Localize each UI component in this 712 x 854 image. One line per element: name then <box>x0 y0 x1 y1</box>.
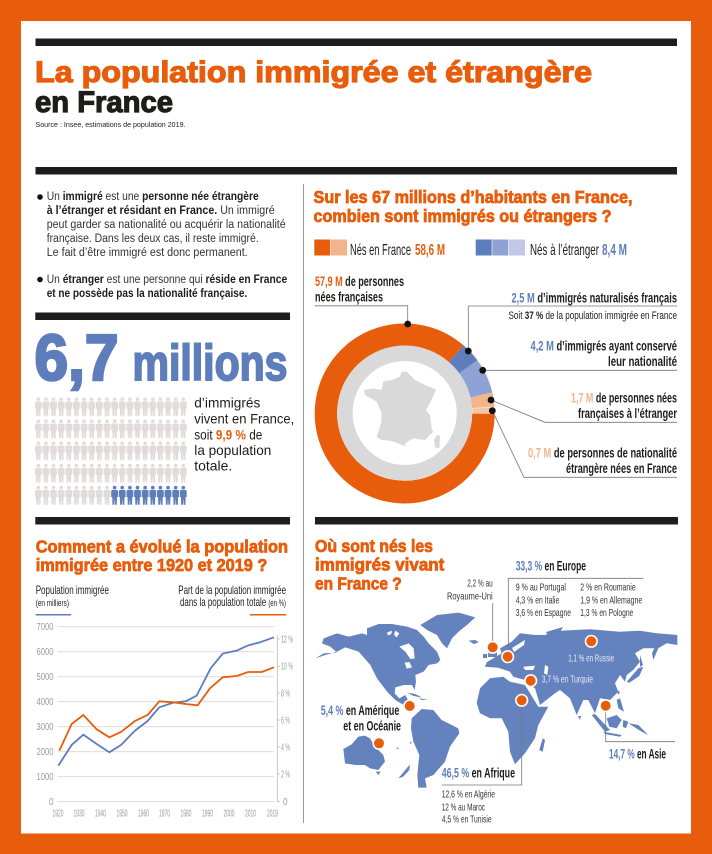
right axis labels: 2 % <box>281 770 290 780</box>
callout: 4,2 M <box>479 338 677 374</box>
big number: 6,7 millions: 6,7 <box>34 321 118 394</box>
callout: 57,9 M <box>315 273 411 327</box>
line chart legend: immigrant population: Population immigrée <box>36 583 109 597</box>
line chart legend: immigrant population <box>36 583 109 616</box>
x axis labels: 1930 <box>74 809 85 820</box>
callout: 2,5 M <box>465 290 677 354</box>
North America <box>315 624 440 707</box>
source: Source : Insee, estimations de population 2019. <box>36 120 186 129</box>
series: immigrant population <box>58 637 274 766</box>
title <box>35 56 592 119</box>
label: Europe: 33,3 % en Europe <box>516 558 586 574</box>
header <box>35 38 677 129</box>
Africa <box>477 677 548 764</box>
definitions text block: Le fait d’être immigré est donc permanent. <box>47 247 248 259</box>
label: Europe: 4,3 % en Italie <box>516 594 559 606</box>
label: United Kingdom <box>447 578 493 602</box>
right axis labels: 8 % <box>281 688 290 700</box>
x axis labels: 1980 <box>180 809 192 820</box>
donut legend: Nés en France <box>350 242 411 259</box>
left axis labels: 5000 <box>36 672 54 683</box>
segment: born French in France <box>315 323 495 503</box>
callout: 1,7 M <box>488 390 677 422</box>
x axis labels: 2019 <box>267 809 278 820</box>
title: La population immigrée et étrangère <box>35 56 592 89</box>
line chart heading: Comment a évolué la population <box>36 536 288 556</box>
label: Africa: 4,5 % en Tunisie <box>442 814 492 826</box>
donut chart <box>315 323 495 503</box>
label: Americas and Oceania: 5,4 % en Amérique <box>321 702 399 718</box>
right axis labels: 0 <box>283 797 288 808</box>
world map <box>315 578 677 788</box>
text: immigrants share <box>194 395 294 474</box>
left axis labels: 7000 <box>36 622 54 633</box>
label: Europe: 2 % en Roumanie <box>580 582 636 594</box>
map markers <box>373 636 612 749</box>
label: Africa: 46,5 % en Afrique <box>442 764 515 780</box>
map heading: en France ? <box>315 573 402 593</box>
Australia <box>343 736 385 770</box>
line chart legend: immigrant population: (en milliers) <box>36 598 69 608</box>
big number: 6,7 millions: millions <box>132 335 288 391</box>
donut legend: 8,4 M <box>602 242 627 259</box>
x axis labels: 2000 <box>224 809 235 820</box>
definitions text block: peut garder sa nationalité ou acquérir la nationalité <box>47 219 286 231</box>
Eurasia <box>485 629 677 715</box>
series: share of population <box>59 667 274 751</box>
donut heading: combien sont immigrés ou étrangers ? <box>314 206 612 226</box>
Asian islands <box>627 667 643 683</box>
x axis labels: 1920 <box>52 809 64 820</box>
right axis labels: 10 % <box>281 662 293 672</box>
line chart legend: share of population <box>178 583 286 616</box>
label: Africa <box>442 764 515 826</box>
label: Europe: 1,3 % en Pologne <box>580 607 633 619</box>
definitions text block: française. Dans les deux cas, il reste immigré. <box>47 233 259 245</box>
x axis labels <box>52 809 278 820</box>
donut heading: Sur les 67 millions d’habitants en France, <box>314 187 632 207</box>
text: immigrants share: la population <box>194 442 271 458</box>
label: Turkey: 3,7 % en Turquie <box>542 674 593 686</box>
line chart legend: share of population: Part de la population immigrée <box>178 583 286 597</box>
x axis labels: 1960 <box>138 809 149 820</box>
segment: immigrants keeping nationality <box>459 360 492 397</box>
right axis labels: 12 % <box>281 634 293 646</box>
donut legend: Nés à l’étranger <box>530 242 599 259</box>
label: United Kingdom: Royaume-Uni <box>447 590 493 602</box>
left axis labels: 2000 <box>36 747 54 758</box>
label: Europe: 3,6 % en Espagne <box>516 607 571 619</box>
x axis labels: 1970 <box>159 809 170 820</box>
inner grey ring <box>345 353 465 473</box>
label: Asia: 14,7 % en Asie <box>609 746 666 762</box>
people pictogram: 20 x 5 figures, 10 highlighted <box>35 397 187 505</box>
map heading: immigrés vivant <box>315 555 444 575</box>
donut heading <box>314 187 632 226</box>
segment: naturalised <box>449 345 477 373</box>
definitions text block: et ne possède pas la nationalité française. <box>47 288 247 300</box>
South America <box>411 709 459 788</box>
label: Europe: 1,9 % en Allemagne <box>580 594 642 606</box>
label: Americas and Oceania <box>321 702 401 733</box>
label: Americas and Oceania: et en Océanie <box>343 717 401 733</box>
callout: 4,2 M: leur nationalité <box>608 353 677 369</box>
text: immigrants share: totale. <box>194 458 232 474</box>
big number: 6,7 millions <box>34 321 288 394</box>
x axis labels: 2010 <box>245 809 256 820</box>
British Isles <box>488 642 497 657</box>
left axis labels <box>36 622 54 808</box>
left axis labels: 1000 <box>36 772 54 783</box>
label: United Kingdom: 2,2 % au <box>467 578 493 590</box>
callout: 0,7 M <box>489 407 677 477</box>
text: immigrants share: vivent en France, <box>194 410 294 426</box>
left axis labels: 6000 <box>36 647 54 658</box>
definitions text block <box>37 191 287 300</box>
line chart legend: share of population: dans la population totale (en %) <box>180 595 286 609</box>
callout: 57,9 M: nées françaises <box>315 289 383 305</box>
segment: French born abroad <box>470 392 495 408</box>
left axis labels: 3000 <box>36 722 54 733</box>
line chart heading: immigrée entre 1920 et 2019 ? <box>36 555 267 575</box>
title: en France <box>35 86 173 119</box>
map heading: Où sont nés les <box>315 536 433 556</box>
donut legend: 58,6 M <box>415 242 445 259</box>
definitions text block: Un immigré est une personne née étrangère <box>47 191 259 203</box>
donut legend <box>314 240 627 259</box>
label: Russia: 1,1 % en Russie <box>568 652 614 664</box>
left axis labels: 4000 <box>36 697 54 708</box>
label: Africa: 12 % au Maroc <box>442 801 485 813</box>
definitions text block: à l’étranger et résidant en France. Un immigré <box>47 205 275 217</box>
right axis labels <box>281 634 293 808</box>
definitions text block: Un étranger est une personne qui réside en France <box>47 274 287 286</box>
icon: map of France <box>364 372 440 448</box>
callout: 57,9 M: 57,9 M de personnes <box>315 273 404 289</box>
text: immigrants share: d’immigrés <box>194 395 260 411</box>
right axis labels: 4 % <box>281 742 290 754</box>
right axis labels: 6 % <box>281 716 290 726</box>
x axis labels: 1940 <box>95 809 106 820</box>
label: Europe: 9 % au Portugal <box>516 582 566 594</box>
label: Africa: 12,6 % en Algérie <box>442 789 495 801</box>
segment: foreigners born in France <box>472 407 495 414</box>
x axis labels: 1950 <box>116 809 128 820</box>
line chart heading <box>36 536 288 575</box>
left axis labels: 0 <box>49 797 54 808</box>
x axis labels: 1990 <box>202 809 213 820</box>
Greenland <box>420 613 475 648</box>
label: Europe <box>516 558 642 619</box>
map heading <box>315 536 444 593</box>
line chart <box>36 622 293 820</box>
connector lines <box>442 578 675 785</box>
text: immigrants share: soit 9,9 % de <box>194 426 262 442</box>
